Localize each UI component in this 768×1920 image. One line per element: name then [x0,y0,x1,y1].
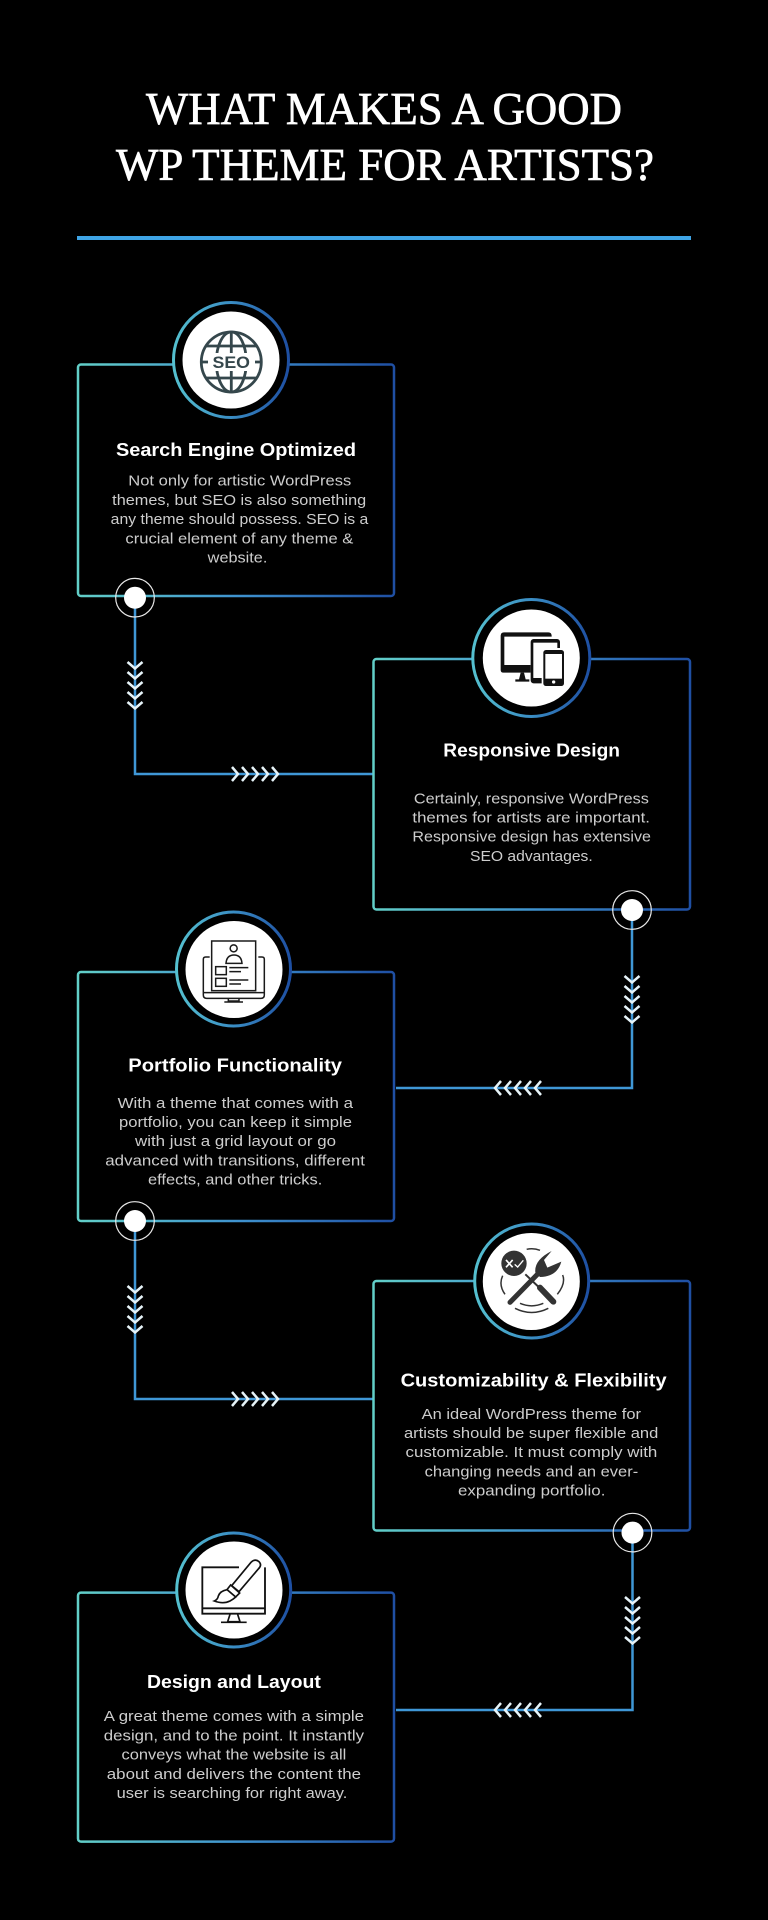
body text: any theme should possess. SEO is a [111,511,369,528]
heading: Customizability & Flexibility [401,1370,667,1390]
body text: themes, but SEO is also something [112,492,366,509]
body text: changing needs and an ever- [425,1463,638,1480]
body text: crucial element of any theme & [125,530,353,547]
body text: website. [207,549,267,566]
panel border [374,1281,690,1530]
body text: customizable. It must comply with [406,1444,657,1461]
icon: responsive devices [473,600,590,716]
node marker [116,578,154,617]
body text: SEO advantages. [470,848,593,865]
title [116,83,654,190]
body text: expanding portfolio. [458,1482,605,1500]
body text [404,1406,658,1500]
body text: Responsive design has extensive [412,829,651,846]
heading: Search Engine Optimized [116,440,356,460]
body text [412,790,651,865]
icon: portfolio [176,912,290,1026]
panel: responsive design [374,600,690,929]
title: WP THEME FOR ARTISTS? [116,139,654,190]
body text: effects, and other tricks. [148,1172,322,1188]
body text: With a theme that comes with a [118,1095,354,1112]
panel border [78,364,394,596]
body text: Certainly, responsive WordPress [414,790,649,807]
body text [111,473,369,566]
connector: card 1 to card 2 [128,598,373,781]
arrow: right chevrons [232,767,278,781]
body text: Not only for artistic WordPress [128,473,351,490]
arrow: right chevrons [232,1392,278,1406]
node marker [613,891,651,929]
panel: design and layout [78,1533,394,1842]
body text: user is searching for right away. [117,1785,347,1802]
panel: customizability and flexibility [374,1224,690,1552]
heading: Portfolio Functionality [128,1055,342,1075]
body text [104,1708,365,1802]
arrow: down chevrons [625,1597,640,1644]
body text [105,1095,366,1188]
panel: portfolio functionality [78,912,394,1240]
connector: card 2 to card 3 [396,910,640,1095]
heading: Design and Layout [147,1672,321,1692]
panel border [78,1593,394,1842]
node marker [116,1202,154,1240]
panel border [374,659,690,910]
title divider [77,236,691,240]
icon: SEO globe [174,302,288,418]
body text: portfolio, you can keep it simple [119,1114,352,1131]
body text: about and delivers the content the [107,1766,361,1783]
body text: conveys what the website is all [122,1747,346,1764]
body text: themes for artists are important. [412,809,650,826]
arrow: down chevrons [624,976,640,1022]
body text: advanced with transitions, different [105,1152,366,1169]
body text: design, and to the point. It instantly [104,1727,365,1744]
body text: An ideal WordPress theme for [422,1406,641,1423]
panel: search engine optimized [78,302,394,617]
connector: card 3 to card 4 [128,1221,373,1406]
connector: card 4 to card 5 [396,1532,640,1717]
body text: A great theme comes with a simple [104,1708,364,1725]
body text: artists should be super flexible and [404,1425,658,1442]
icon: SEO globe: SEO [212,354,250,372]
arrow: left chevrons [495,1081,541,1095]
panel border [78,972,394,1221]
node marker [613,1513,652,1552]
heading: Responsive Design [443,741,620,761]
title: WHAT MAKES A GOOD [146,83,622,134]
body text: with just a grid layout or go [134,1133,336,1150]
arrow: down chevrons [128,1286,142,1332]
icon: monitor with paintbrush [177,1533,291,1647]
arrow: down chevrons [128,662,142,708]
arrow: left chevrons [495,1703,541,1717]
icon: tools [475,1224,589,1338]
